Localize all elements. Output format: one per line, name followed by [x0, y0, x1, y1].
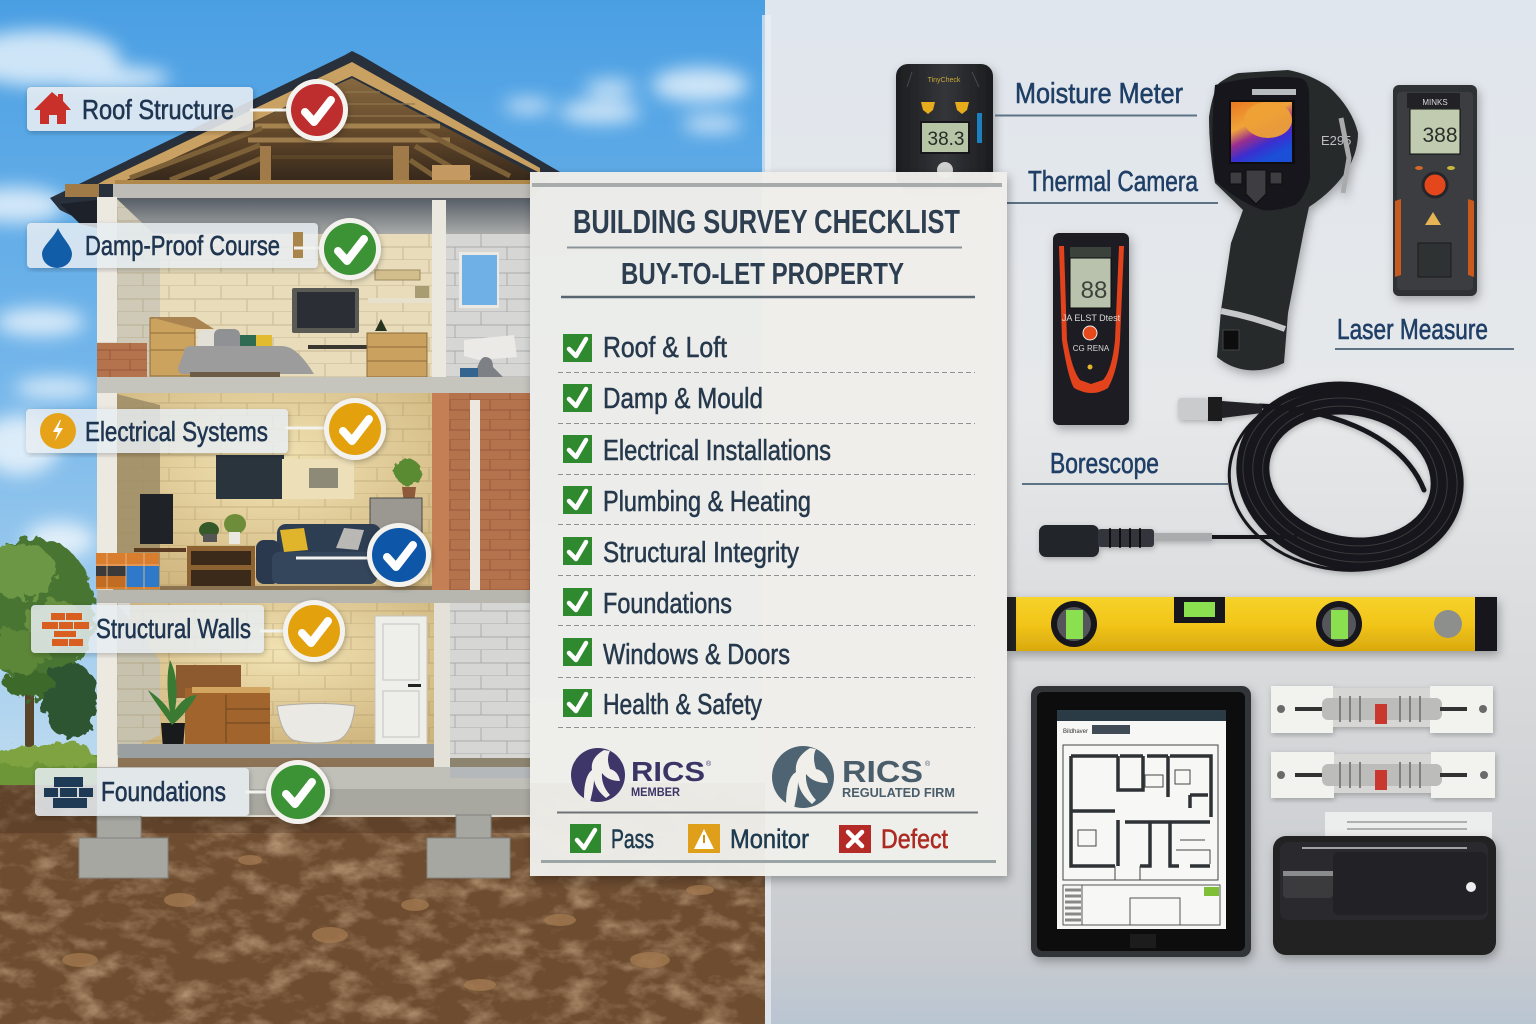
bath — [277, 704, 355, 743]
background: clouds — [0, 30, 748, 558]
potted plant — [148, 660, 197, 748]
title block — [1063, 885, 1220, 925]
icon: house — [34, 92, 71, 124]
tool: laser measure: MINKS — [1422, 98, 1448, 107]
house — [50, 51, 560, 878]
caption: thermal camera: Thermal Camera — [1028, 166, 1199, 198]
status badge: amber — [324, 398, 386, 460]
item: Windows & Doors — [563, 638, 790, 671]
label: Roof Structure: Roof Structure — [82, 94, 234, 125]
tv cabinet — [187, 546, 255, 590]
icon: blocks — [44, 777, 93, 808]
label: Damp-Proof Course: Damp-Proof Course — [85, 230, 280, 261]
papers — [1325, 812, 1492, 840]
tool: tablet with floor plan — [1031, 686, 1251, 957]
logo: RICS regulated firm: ® — [925, 760, 931, 768]
icon: bolt — [40, 413, 76, 449]
status badge: amber — [283, 600, 345, 662]
item: Electrical Installations: Electrical Installations — [603, 435, 831, 467]
logo: RICS member: ® — [706, 760, 712, 768]
tool: thermal camera — [1209, 70, 1358, 370]
borescope probe — [1039, 525, 1212, 557]
legend — [570, 824, 948, 854]
logo: RICS regulated firm: REGULATED FIRM — [842, 785, 955, 800]
item: Health & Safety: Health & Safety — [603, 689, 762, 721]
foundation piers — [79, 815, 510, 878]
brick pile — [96, 553, 159, 589]
wall panel — [216, 455, 354, 499]
legend: pass: Pass — [611, 824, 654, 854]
logo: RICS regulated firm: RICS — [842, 754, 923, 789]
background: tools surface — [765, 0, 1536, 1024]
item: Plumbing & Heating: Plumbing & Heating — [603, 486, 811, 518]
tool: laser measure: 388 — [1422, 124, 1458, 147]
tool: moisture meter — [896, 64, 993, 189]
tool: moisture meter: TinyCheck — [928, 77, 961, 84]
label: Structural Walls — [31, 600, 345, 662]
item: Roof & Loft: Roof & Loft — [603, 332, 727, 364]
tool: laser measure — [1393, 85, 1477, 296]
item: Structural Integrity: Structural Integrity — [603, 537, 799, 569]
ground — [0, 783, 765, 1024]
logo: RICS member: MEMBER — [631, 785, 680, 799]
connector and badge: blue — [296, 523, 431, 587]
logo: RICS member — [571, 748, 712, 802]
status badge: green — [266, 760, 330, 824]
door — [375, 616, 427, 745]
bed and dresser — [150, 317, 314, 377]
legend: defect — [839, 824, 948, 854]
window — [459, 252, 499, 308]
logo: RICS member: RICS — [631, 756, 705, 787]
borescope connector — [1178, 397, 1262, 421]
tool: spirit level — [1007, 597, 1497, 651]
tool: distance meter: 88 — [1081, 277, 1107, 304]
sofa — [256, 524, 381, 584]
item: Foundations: Foundations — [603, 588, 732, 620]
wooden cabinet — [176, 665, 270, 746]
plant on shelf — [394, 460, 422, 503]
tool: moisture meter: 38.3 — [928, 129, 964, 150]
lower floor — [97, 590, 530, 775]
caption: borescope: Borescope — [1050, 448, 1159, 480]
tool: tablet with floor plan: Bildhaver — [1063, 729, 1088, 735]
tool: crack gauge 1 — [1271, 686, 1493, 733]
label: Roof Structure — [27, 79, 348, 141]
label: Damp-Proof Course — [27, 218, 381, 280]
item: Damp & Mould: Damp & Mould — [603, 383, 763, 415]
caption: moisture meter: Moisture Meter — [1015, 78, 1183, 110]
tool: distance meter: JA ELST Dtest — [1062, 313, 1121, 323]
label: Foundations: Foundations — [101, 776, 226, 807]
tv — [134, 494, 186, 552]
shelves — [368, 270, 432, 303]
legend: monitor: Monitor — [730, 824, 809, 854]
cabinet — [370, 498, 422, 536]
floor plan — [1071, 756, 1211, 866]
title: BUILDING SURVEY CHECKLIST — [573, 203, 960, 240]
label: Structural Walls: Structural Walls — [96, 613, 251, 644]
desk and drawers — [308, 319, 427, 377]
tool: distance meter — [1053, 233, 1129, 425]
tool: distance meter: CG RENA — [1073, 344, 1110, 353]
walls and slabs — [97, 197, 530, 817]
status badge: green — [319, 218, 381, 280]
status badge: red — [286, 79, 348, 141]
tool: borescope cable — [1039, 370, 1473, 582]
item: Damp & Mould — [563, 383, 763, 415]
icon: bricks — [42, 613, 89, 646]
panel: checklist — [530, 172, 1007, 876]
logo: RICS regulated firm — [772, 746, 955, 808]
roof truss — [130, 92, 510, 180]
item: Roof & Loft — [563, 332, 727, 364]
tool: crack gauge 2 — [1271, 752, 1495, 798]
label: Foundations — [35, 760, 330, 824]
item: Health & Safety — [563, 689, 762, 721]
toilet — [460, 335, 517, 377]
legend: monitor — [688, 824, 809, 854]
top floor — [97, 184, 530, 377]
tv — [292, 288, 359, 333]
label: Electrical Systems — [26, 398, 386, 460]
checklist items — [563, 332, 831, 721]
foundation slab — [97, 767, 530, 815]
caption: laser measure: Laser Measure — [1337, 314, 1488, 346]
background: divider — [762, 15, 771, 1024]
tree and shrubs — [0, 538, 98, 785]
background: sky — [0, 0, 765, 800]
icon: water drop — [42, 228, 72, 268]
middle floor — [96, 377, 530, 591]
legend: pass — [570, 824, 654, 854]
tool: black case — [1273, 836, 1496, 955]
roof — [50, 51, 560, 228]
label: Electrical Systems: Electrical Systems — [85, 416, 268, 447]
subtitle: BUY-TO-LET PROPERTY — [621, 256, 904, 291]
tool: thermal camera: E295 — [1321, 133, 1351, 148]
legend: defect: Defect — [881, 824, 948, 854]
plants — [199, 514, 246, 544]
item: Foundations — [563, 588, 732, 620]
item: Windows & Doors: Windows & Doors — [603, 639, 790, 671]
